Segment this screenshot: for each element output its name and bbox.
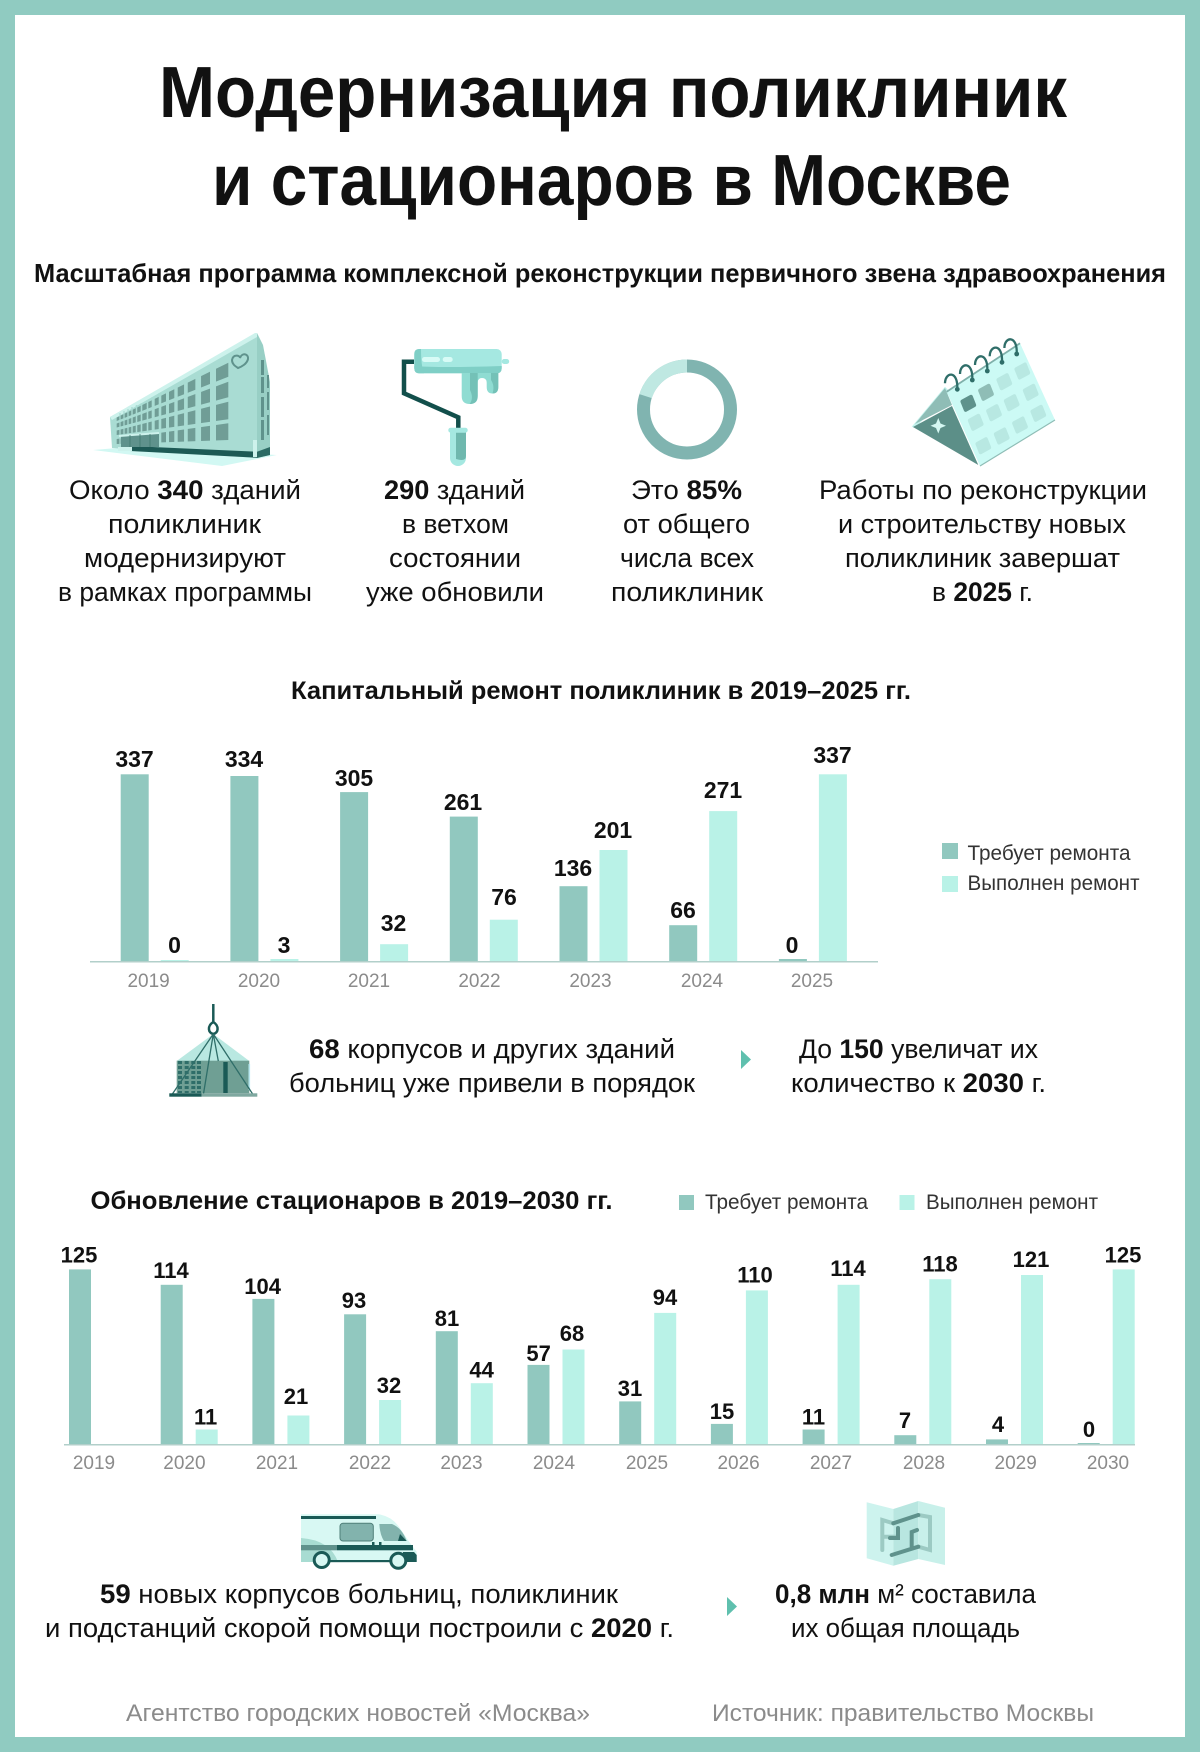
bars: needs repair bbox=[69, 1269, 1100, 1445]
text: completion in 2025: и строительству новых bbox=[838, 509, 1126, 539]
text: 59 new buildings: и подстанций скорой помощи построили с 2020 г. bbox=[45, 1613, 674, 1643]
value labels: 3 bbox=[278, 932, 290, 958]
year axis labels: 2027 bbox=[810, 1453, 852, 1474]
legend: hospital chart: Выполнен ремонт bbox=[926, 1191, 1098, 1214]
year axis labels: 2022 bbox=[349, 1453, 391, 1474]
value labels: 0 bbox=[1083, 1417, 1095, 1442]
year axis labels: 2023 bbox=[569, 971, 612, 992]
value labels: 94 bbox=[653, 1285, 678, 1310]
bars: repair done bbox=[161, 774, 847, 962]
title: и стационаров в Москве bbox=[212, 141, 1011, 221]
value labels: 136 bbox=[554, 855, 592, 881]
year axis labels: 2020 bbox=[238, 971, 280, 992]
text: completion in 2025: поликлиник завершат bbox=[845, 543, 1120, 573]
value labels: 15 bbox=[710, 1399, 734, 1424]
footer: agency: Агентство городских новостей «Москва» bbox=[126, 1700, 590, 1727]
value labels: 125 bbox=[1105, 1242, 1141, 1268]
year axis labels: 2021 bbox=[256, 1453, 298, 1474]
panel: key facts bbox=[58, 333, 1147, 607]
heading: clinic repairs chart: Капитальный ремонт поликлиник в 2019–2025 гг. bbox=[291, 677, 911, 705]
text: total area: их общая площадь bbox=[791, 1613, 1020, 1643]
value labels: 121 bbox=[1013, 1247, 1049, 1272]
value labels: 7 bbox=[899, 1408, 911, 1433]
callout: new buildings bbox=[45, 1501, 1037, 1643]
value labels: 44 bbox=[469, 1358, 495, 1382]
year axis labels: 2021 bbox=[348, 971, 390, 992]
value labels: 271 bbox=[704, 777, 742, 803]
text: 290 buildings: состоянии bbox=[389, 543, 521, 573]
value labels: 334 bbox=[225, 746, 263, 772]
icon: calendar bbox=[912, 339, 1055, 466]
text: up to 150 by 2030: До 150 увеличат их bbox=[799, 1034, 1038, 1064]
value labels: 31 bbox=[618, 1376, 642, 1401]
legend bbox=[942, 842, 1140, 895]
year axis labels: 2023 bbox=[440, 1453, 483, 1474]
year axis labels: 2020 bbox=[163, 1453, 206, 1474]
value labels: 118 bbox=[922, 1252, 958, 1276]
year axis labels: 2024 bbox=[681, 971, 724, 992]
text: up to 150 by 2030: количество к 2030 г. bbox=[791, 1068, 1046, 1098]
text: about 340 buildings bbox=[58, 475, 312, 607]
text: about 340 buildings: Около 340 зданий bbox=[69, 475, 301, 505]
value labels: 0 bbox=[786, 932, 798, 958]
value labels: 68 bbox=[560, 1321, 584, 1346]
text: 59 new buildings bbox=[45, 1579, 674, 1643]
value labels: 114 bbox=[830, 1256, 867, 1281]
legend: hospital chart bbox=[679, 1191, 1098, 1214]
year axis labels: 2025 bbox=[791, 971, 833, 992]
icon: building bbox=[93, 333, 277, 466]
value labels: 76 bbox=[491, 884, 517, 910]
text: 85 percent: Это 85% bbox=[631, 475, 742, 505]
text: total area bbox=[775, 1579, 1037, 1643]
value labels: 11 bbox=[802, 1404, 825, 1430]
title: Модернизация поликлиник bbox=[159, 53, 1068, 133]
year axis labels: 2019 bbox=[127, 971, 170, 992]
value labels: 57 bbox=[526, 1341, 551, 1366]
value labels: 11 bbox=[194, 1404, 217, 1430]
year axis labels: 2025 bbox=[626, 1453, 668, 1474]
icon: paint roller bbox=[404, 349, 509, 466]
text: 290 buildings: уже обновили bbox=[366, 577, 544, 607]
text: 68 buildings: больниц уже привели в порядок bbox=[289, 1068, 695, 1098]
value labels: 110 bbox=[737, 1262, 773, 1288]
text: 85 percent: числа всех bbox=[620, 543, 754, 573]
text: about 340 buildings: поликлиник bbox=[108, 509, 261, 539]
bar chart: clinic repairs 2019-2025 bbox=[90, 742, 1140, 992]
value labels: 201 bbox=[594, 817, 632, 843]
text: 59 new buildings: 59 новых корпусов больниц, поликлиник bbox=[100, 1579, 618, 1609]
legend: hospital chart: Требует ремонта bbox=[705, 1191, 868, 1214]
text: 290 buildings bbox=[366, 475, 544, 607]
value labels: 125 bbox=[61, 1242, 97, 1268]
bar chart: hospital renewal 2019-2030 bbox=[61, 1242, 1141, 1474]
text: 85 percent bbox=[611, 475, 763, 607]
text: total area: 0,8 млн м² составила bbox=[775, 1579, 1037, 1609]
callout: hospital buildings repaired bbox=[169, 1004, 1046, 1098]
value labels: 114 bbox=[153, 1258, 190, 1283]
value labels: 4 bbox=[992, 1412, 1005, 1437]
year axis labels: 2026 bbox=[717, 1453, 760, 1474]
text: 290 buildings: в ветхом bbox=[402, 509, 509, 539]
value labels bbox=[115, 742, 852, 958]
icon: ambulance bbox=[301, 1514, 417, 1568]
text: completion in 2025 bbox=[819, 475, 1147, 607]
value labels: 32 bbox=[381, 910, 406, 936]
icon: donut 85% bbox=[644, 366, 730, 453]
value labels: 66 bbox=[670, 897, 696, 923]
value labels: 81 bbox=[435, 1306, 459, 1331]
value labels: 337 bbox=[813, 742, 852, 768]
value labels: 93 bbox=[342, 1288, 366, 1313]
value labels: 337 bbox=[115, 746, 154, 772]
text: completion in 2025: Работы по реконструкции bbox=[819, 475, 1147, 505]
value labels: 305 bbox=[335, 765, 373, 791]
value labels: 104 bbox=[244, 1274, 282, 1299]
value labels bbox=[61, 1242, 1141, 1442]
bars: repair done bbox=[196, 1269, 1135, 1445]
icon: floor plan map bbox=[867, 1501, 945, 1566]
text: 290 buildings: 290 зданий bbox=[384, 475, 525, 505]
year axis labels: 2030 bbox=[1087, 1453, 1129, 1474]
text: about 340 buildings: модернизируют bbox=[84, 543, 286, 573]
legend: Требует ремонта bbox=[968, 842, 1131, 865]
text: about 340 buildings: в рамках программы bbox=[58, 577, 312, 607]
text: 68 buildings: 68 корпусов и других зданий bbox=[309, 1034, 675, 1064]
year axis labels: 2024 bbox=[533, 1453, 576, 1474]
year axis labels: 2028 bbox=[903, 1453, 945, 1474]
year axis labels: 2022 bbox=[458, 971, 501, 992]
value labels: 32 bbox=[377, 1373, 401, 1398]
year axis labels bbox=[127, 971, 833, 992]
bars: needs repair bbox=[121, 774, 807, 962]
footer: source: Источник: правительство Москвы bbox=[712, 1700, 1094, 1727]
text: 85 percent: от общего bbox=[623, 509, 750, 539]
year axis labels: 2019 bbox=[73, 1453, 115, 1474]
text: 85 percent: поликлиник bbox=[611, 577, 763, 607]
value labels: 261 bbox=[444, 789, 482, 815]
arrow bbox=[741, 1050, 751, 1069]
value labels: 21 bbox=[284, 1384, 308, 1409]
text: 68 buildings bbox=[289, 1034, 695, 1098]
subtitle: Масштабная программа комплексной реконструкции первичного звена здравоохранения bbox=[34, 258, 1166, 288]
icon: crane load bbox=[169, 1004, 257, 1097]
text: up to 150 by 2030 bbox=[791, 1034, 1046, 1098]
arrow bbox=[727, 1597, 737, 1616]
heading: hospital renewal chart: Обновление стационаров в 2019–2030 гг. bbox=[90, 1187, 612, 1215]
text: completion in 2025: в 2025 г. bbox=[932, 577, 1033, 607]
legend: Выполнен ремонт bbox=[968, 872, 1140, 895]
title bbox=[159, 53, 1068, 221]
value labels: 0 bbox=[168, 932, 181, 958]
year axis labels: 2029 bbox=[995, 1453, 1037, 1474]
year axis labels bbox=[73, 1453, 1129, 1474]
